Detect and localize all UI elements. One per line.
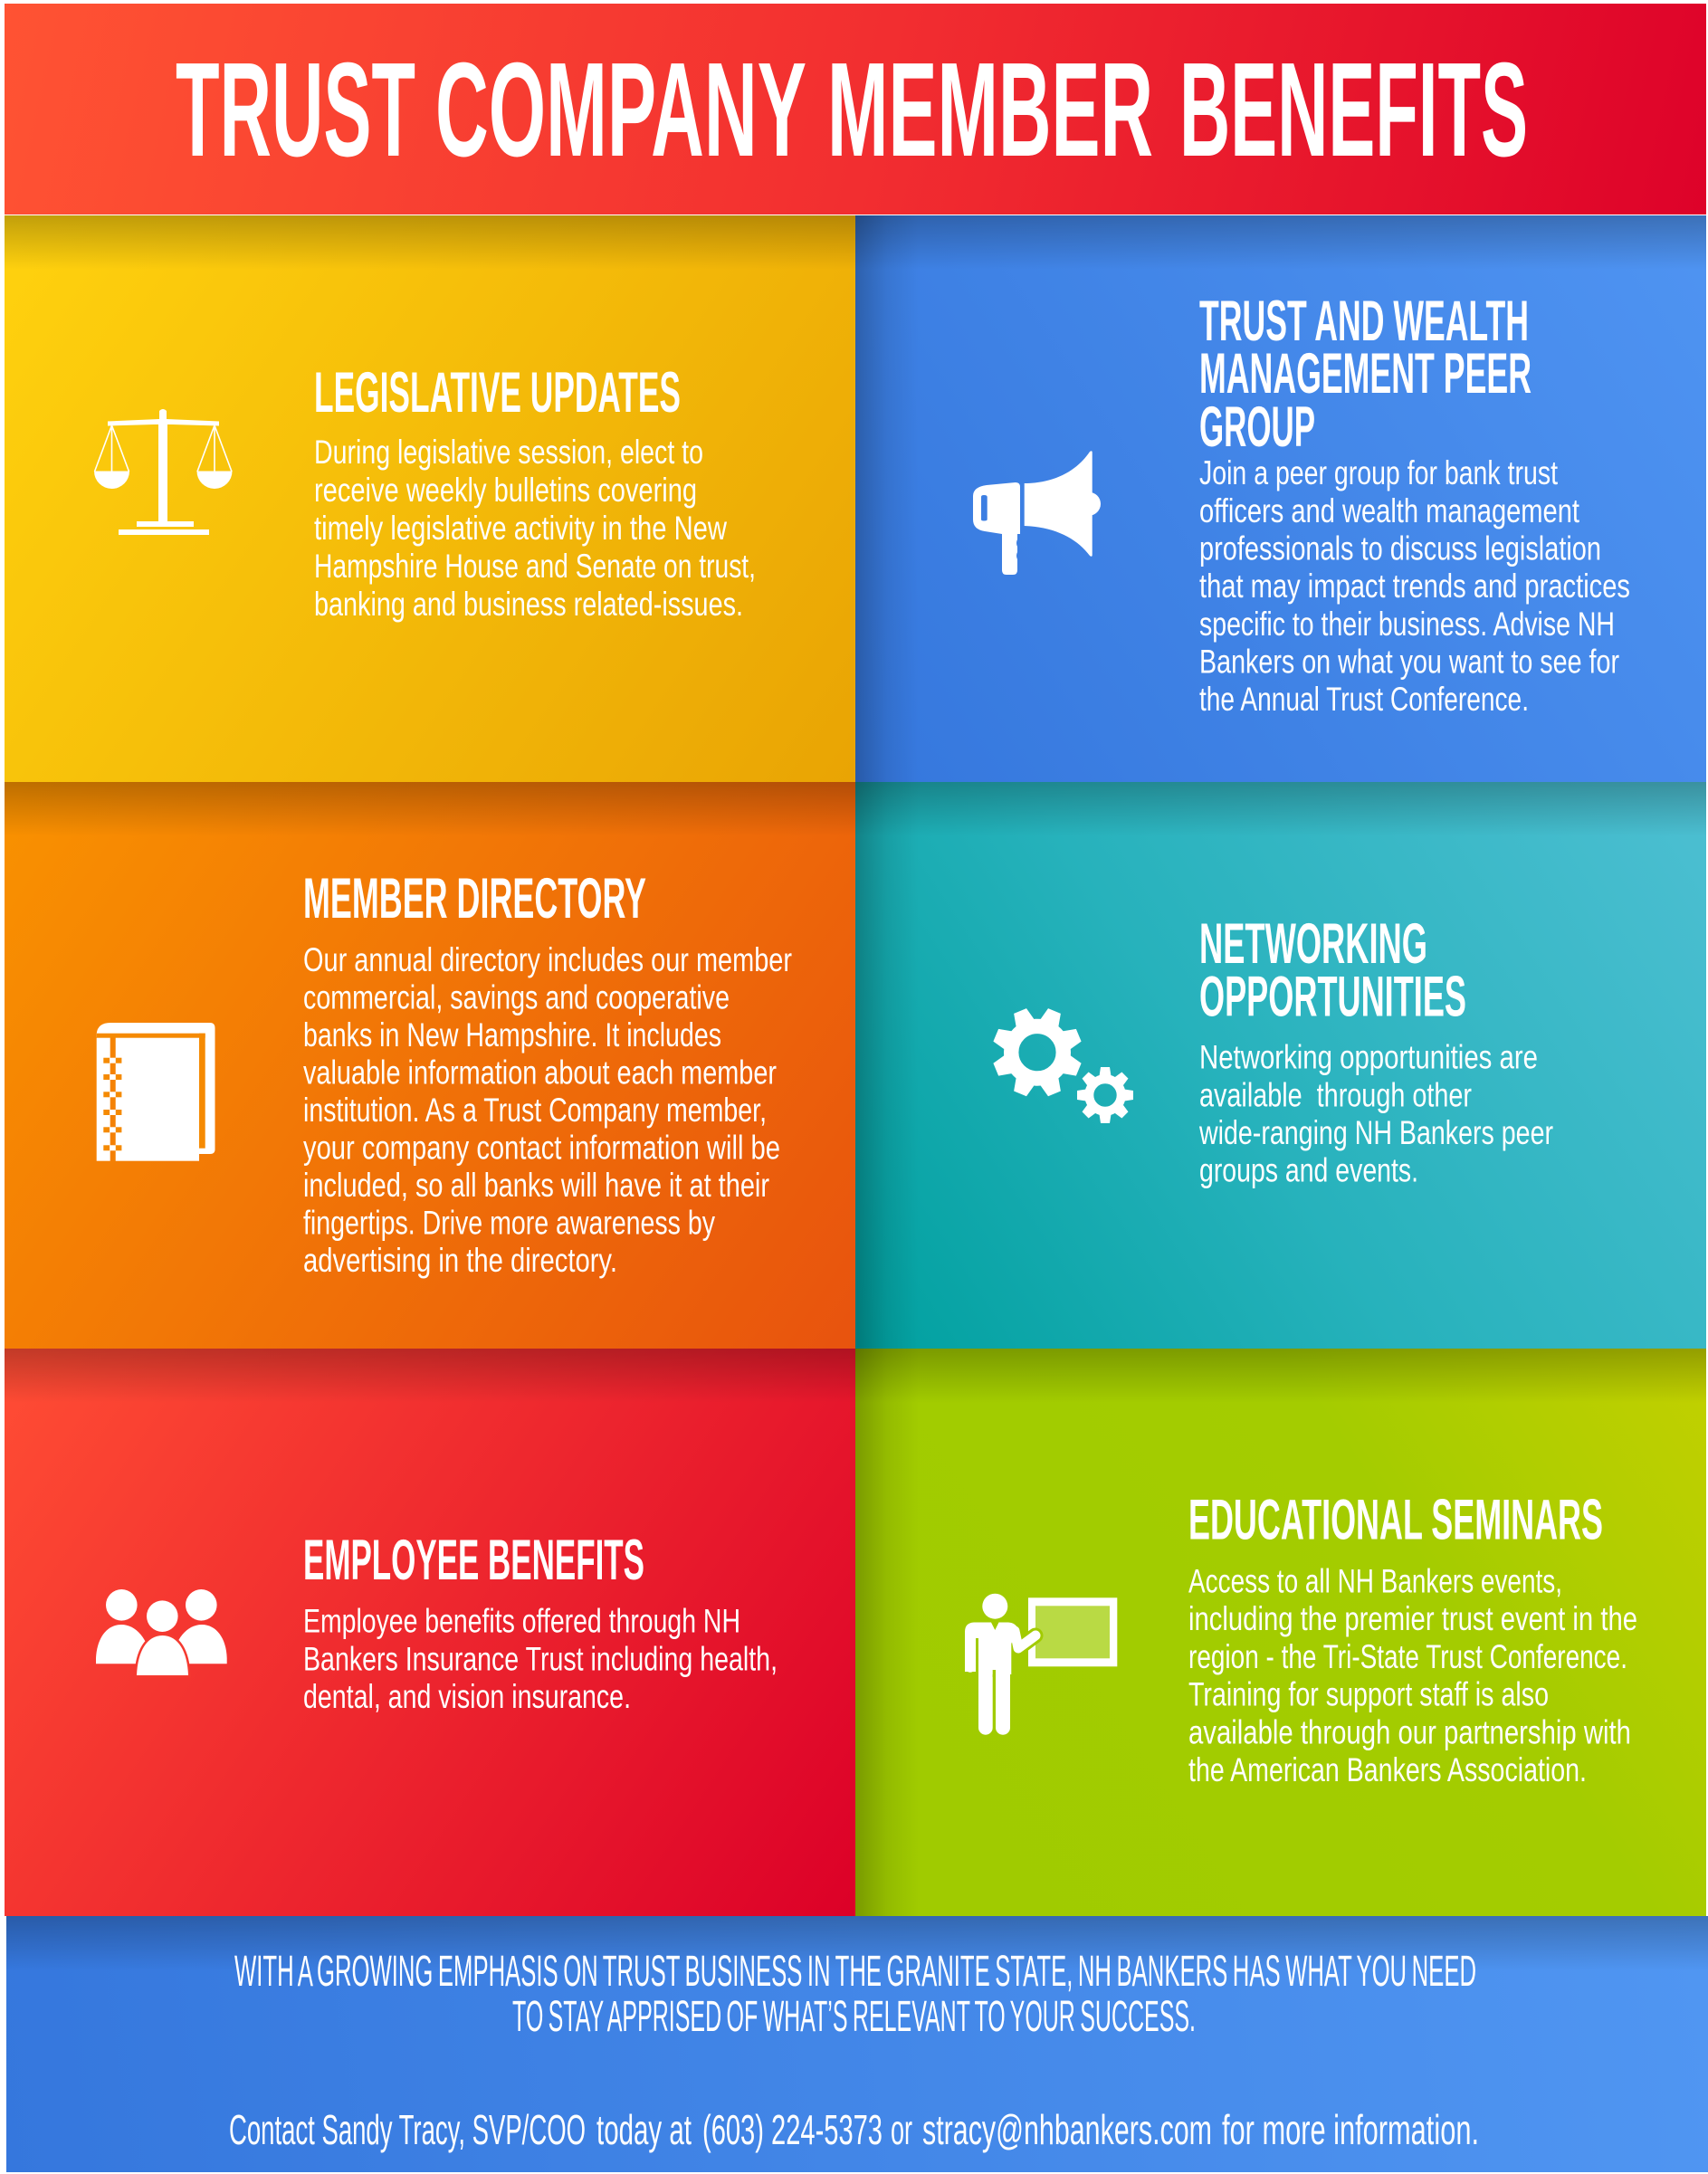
panel: legislative updates (5, 215, 855, 782)
legislative body text: receive weekly bulletins covering (314, 472, 697, 509)
icon: presenter at board (965, 1594, 1117, 1735)
networking heading (1199, 912, 1466, 1028)
directory heading: MEMBER DIRECTORY (303, 867, 646, 930)
networking heading: NETWORKING (1199, 912, 1427, 976)
employee body text: Employee benefits offered through NH (303, 1602, 740, 1640)
panel: trust and wealth peer group (855, 215, 1706, 782)
footer band (6, 1916, 1708, 2172)
directory body text: advertising in the directory. (303, 1242, 617, 1279)
legislative body text: banking and business related-issues. (314, 586, 743, 623)
peer group heading: GROUP (1199, 396, 1315, 459)
icon: megaphone (973, 451, 1101, 575)
networking body text: groups and events. (1199, 1151, 1418, 1189)
networking panel background (855, 782, 1706, 1349)
networking heading: OPPORTUNITIES (1199, 965, 1466, 1028)
seminars panel background (855, 1349, 1706, 1916)
contact line: today at (596, 2106, 692, 2153)
icon: group of people (96, 1589, 227, 1675)
networking body text: wide-ranging NH Bankers peer (1198, 1114, 1553, 1151)
title: MEMBER (827, 35, 1153, 185)
title: TRUST (176, 35, 415, 185)
contact line: for more information. (1222, 2106, 1479, 2153)
contact line: or (891, 2106, 912, 2153)
peer group body text: Join a peer group for bank trust (1199, 454, 1559, 491)
directory body text: Our annual directory includes our member (303, 941, 792, 978)
peer group panel background (855, 215, 1706, 782)
panel: employee benefits (5, 1349, 855, 1916)
employee panel background (5, 1349, 855, 1916)
directory body text: included, so all banks will have it at their (303, 1167, 769, 1204)
networking body text: Networking opportunities are (1199, 1039, 1538, 1075)
title: COMPANY (435, 35, 806, 185)
footer message (234, 1948, 1476, 2041)
footer background (6, 1916, 1708, 2172)
legislative heading: LEGISLATIVE UPDATES (314, 361, 681, 424)
directory panel background (5, 782, 855, 1349)
employee body text: dental, and vision insurance. (303, 1678, 631, 1715)
directory body text: your company contact information will be (303, 1130, 780, 1166)
title (176, 35, 1528, 185)
header banner (5, 4, 1706, 215)
directory body text: fingertips. Drive more awareness by (303, 1204, 715, 1242)
header background (5, 4, 1706, 215)
seminars body text: the American Bankers Association. (1188, 1751, 1587, 1788)
contact line: stracy@nhbankers.com (922, 2106, 1212, 2153)
employee body text (303, 1602, 778, 1715)
legislative panel background (5, 215, 855, 782)
legislative body text (314, 434, 756, 623)
panel: member directory (5, 782, 855, 1349)
peer group body text: officers and wealth management (1199, 492, 1580, 529)
legislative body text: Hampshire House and Senate on trust, (314, 548, 756, 585)
panel: educational seminars (855, 1349, 1706, 1916)
peer group body text: the Annual Trust Conference. (1199, 681, 1529, 718)
legislative body text: timely legislative activity in the New (314, 510, 727, 547)
peer group heading (1199, 290, 1531, 459)
legislative body text: During legislative session, elect to (314, 434, 703, 471)
directory body text: banks in New Hampshire. It includes (303, 1016, 721, 1054)
icon: spiral notebook (97, 1023, 215, 1161)
directory body text (303, 941, 792, 1279)
directory body text: valuable information about each member (303, 1054, 777, 1092)
contact line (229, 2106, 1479, 2153)
seminars body text: Access to all NH Bankers events, (1188, 1562, 1562, 1600)
seminars body text: Training for support staff is also (1188, 1676, 1549, 1712)
icon: scales of justice (94, 409, 232, 535)
employee body text: Bankers Insurance Trust including health, (303, 1640, 778, 1678)
directory body text: commercial, savings and cooperative (303, 979, 730, 1015)
icon: gears (992, 1007, 1133, 1123)
peer group body text: professionals to discuss legislation (1199, 530, 1601, 567)
panel: networking opportunities (855, 782, 1706, 1349)
employee heading: EMPLOYEE BENEFITS (303, 1529, 644, 1592)
contact line: Contact Sandy Tracy, SVP/COO (229, 2106, 586, 2153)
peer group body text (1199, 454, 1630, 718)
networking body text (1198, 1039, 1553, 1189)
seminars body text (1188, 1562, 1637, 1788)
contact line: (603) 224-5373 (702, 2106, 883, 2153)
networking body text: available through other (1199, 1077, 1472, 1113)
directory body text: institution. As a Trust Company member, (303, 1092, 767, 1129)
